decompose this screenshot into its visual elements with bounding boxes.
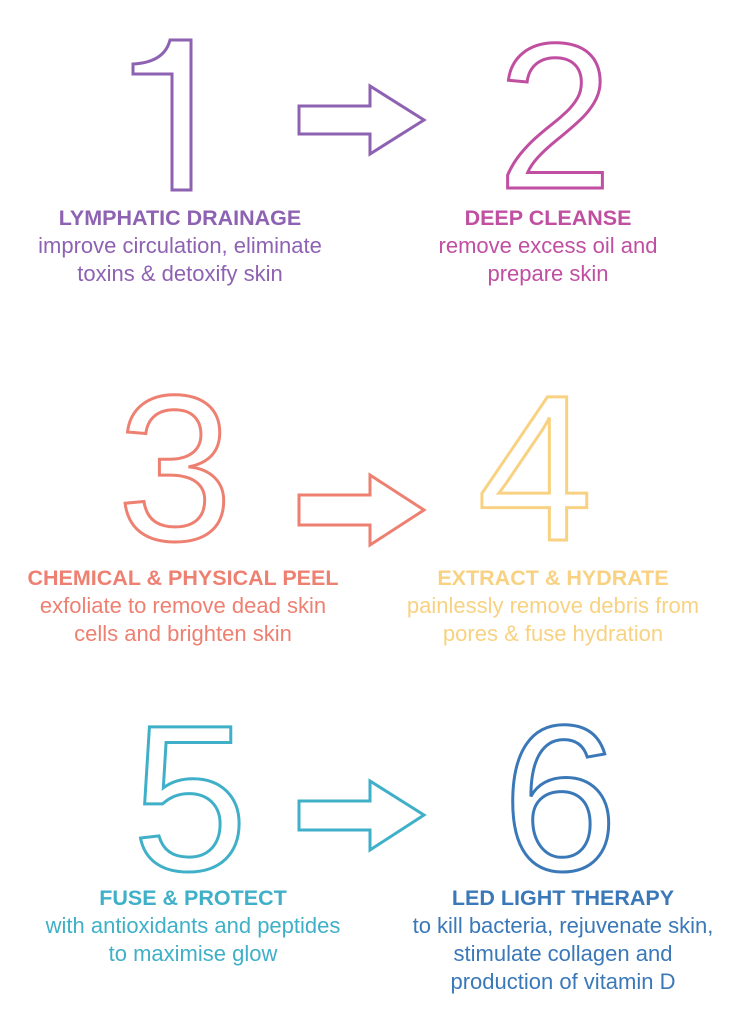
- text: chemical peel: cells and brighten skin: [74, 621, 292, 646]
- text: chemical peel: exfoliate to remove dead skin: [40, 593, 326, 618]
- text: deep cleanse: DEEP CLEANSE: [465, 206, 631, 230]
- arrow 2: [299, 475, 424, 545]
- text: led light therapy: stimulate collagen and: [454, 941, 672, 966]
- text: extract & hydrate: [407, 566, 699, 646]
- text: chemical peel: [28, 566, 338, 646]
- number 6: 6: [502, 683, 618, 915]
- arrow 1: [299, 86, 424, 154]
- text: deep cleanse: [439, 206, 657, 286]
- text: lymphatic drainage: [38, 206, 322, 286]
- text: extract & hydrate: EXTRACT & HYDRATE: [437, 566, 669, 590]
- text: lymphatic drainage: toxins & detoxify skin: [77, 261, 283, 286]
- number 3: 3: [117, 353, 233, 585]
- text: led light therapy: production of vitamin D: [450, 969, 676, 994]
- text: extract & hydrate: pores & fuse hydration: [443, 621, 663, 646]
- number 1: [133, 40, 191, 190]
- text: led light therapy: [412, 886, 713, 994]
- number 4: 4: [477, 353, 593, 585]
- text: fuse & protect: with antioxidants and peptides: [46, 913, 340, 938]
- text: deep cleanse: prepare skin: [487, 261, 609, 286]
- text: led light therapy: LED LIGHT THERAPY: [452, 886, 674, 910]
- text: lymphatic drainage: improve circulation, eliminate: [38, 233, 322, 258]
- text: chemical peel: CHEMICAL & PHYSICAL PEEL: [28, 566, 338, 590]
- number 5: 5: [132, 683, 248, 915]
- arrow 3: [299, 781, 424, 850]
- text: led light therapy: to kill bacteria, rejuvenate skin,: [413, 913, 713, 938]
- text: lymphatic drainage: LYMPHATIC DRAINAGE: [59, 206, 301, 230]
- number 2: 2: [497, 1, 613, 233]
- text: deep cleanse: remove excess oil and: [439, 233, 657, 258]
- text: fuse & protect: [46, 886, 340, 966]
- text: extract & hydrate: painlessly remove debris from: [407, 593, 699, 618]
- text: fuse & protect: FUSE & PROTECT: [99, 886, 287, 910]
- text: fuse & protect: to maximise glow: [109, 941, 277, 966]
